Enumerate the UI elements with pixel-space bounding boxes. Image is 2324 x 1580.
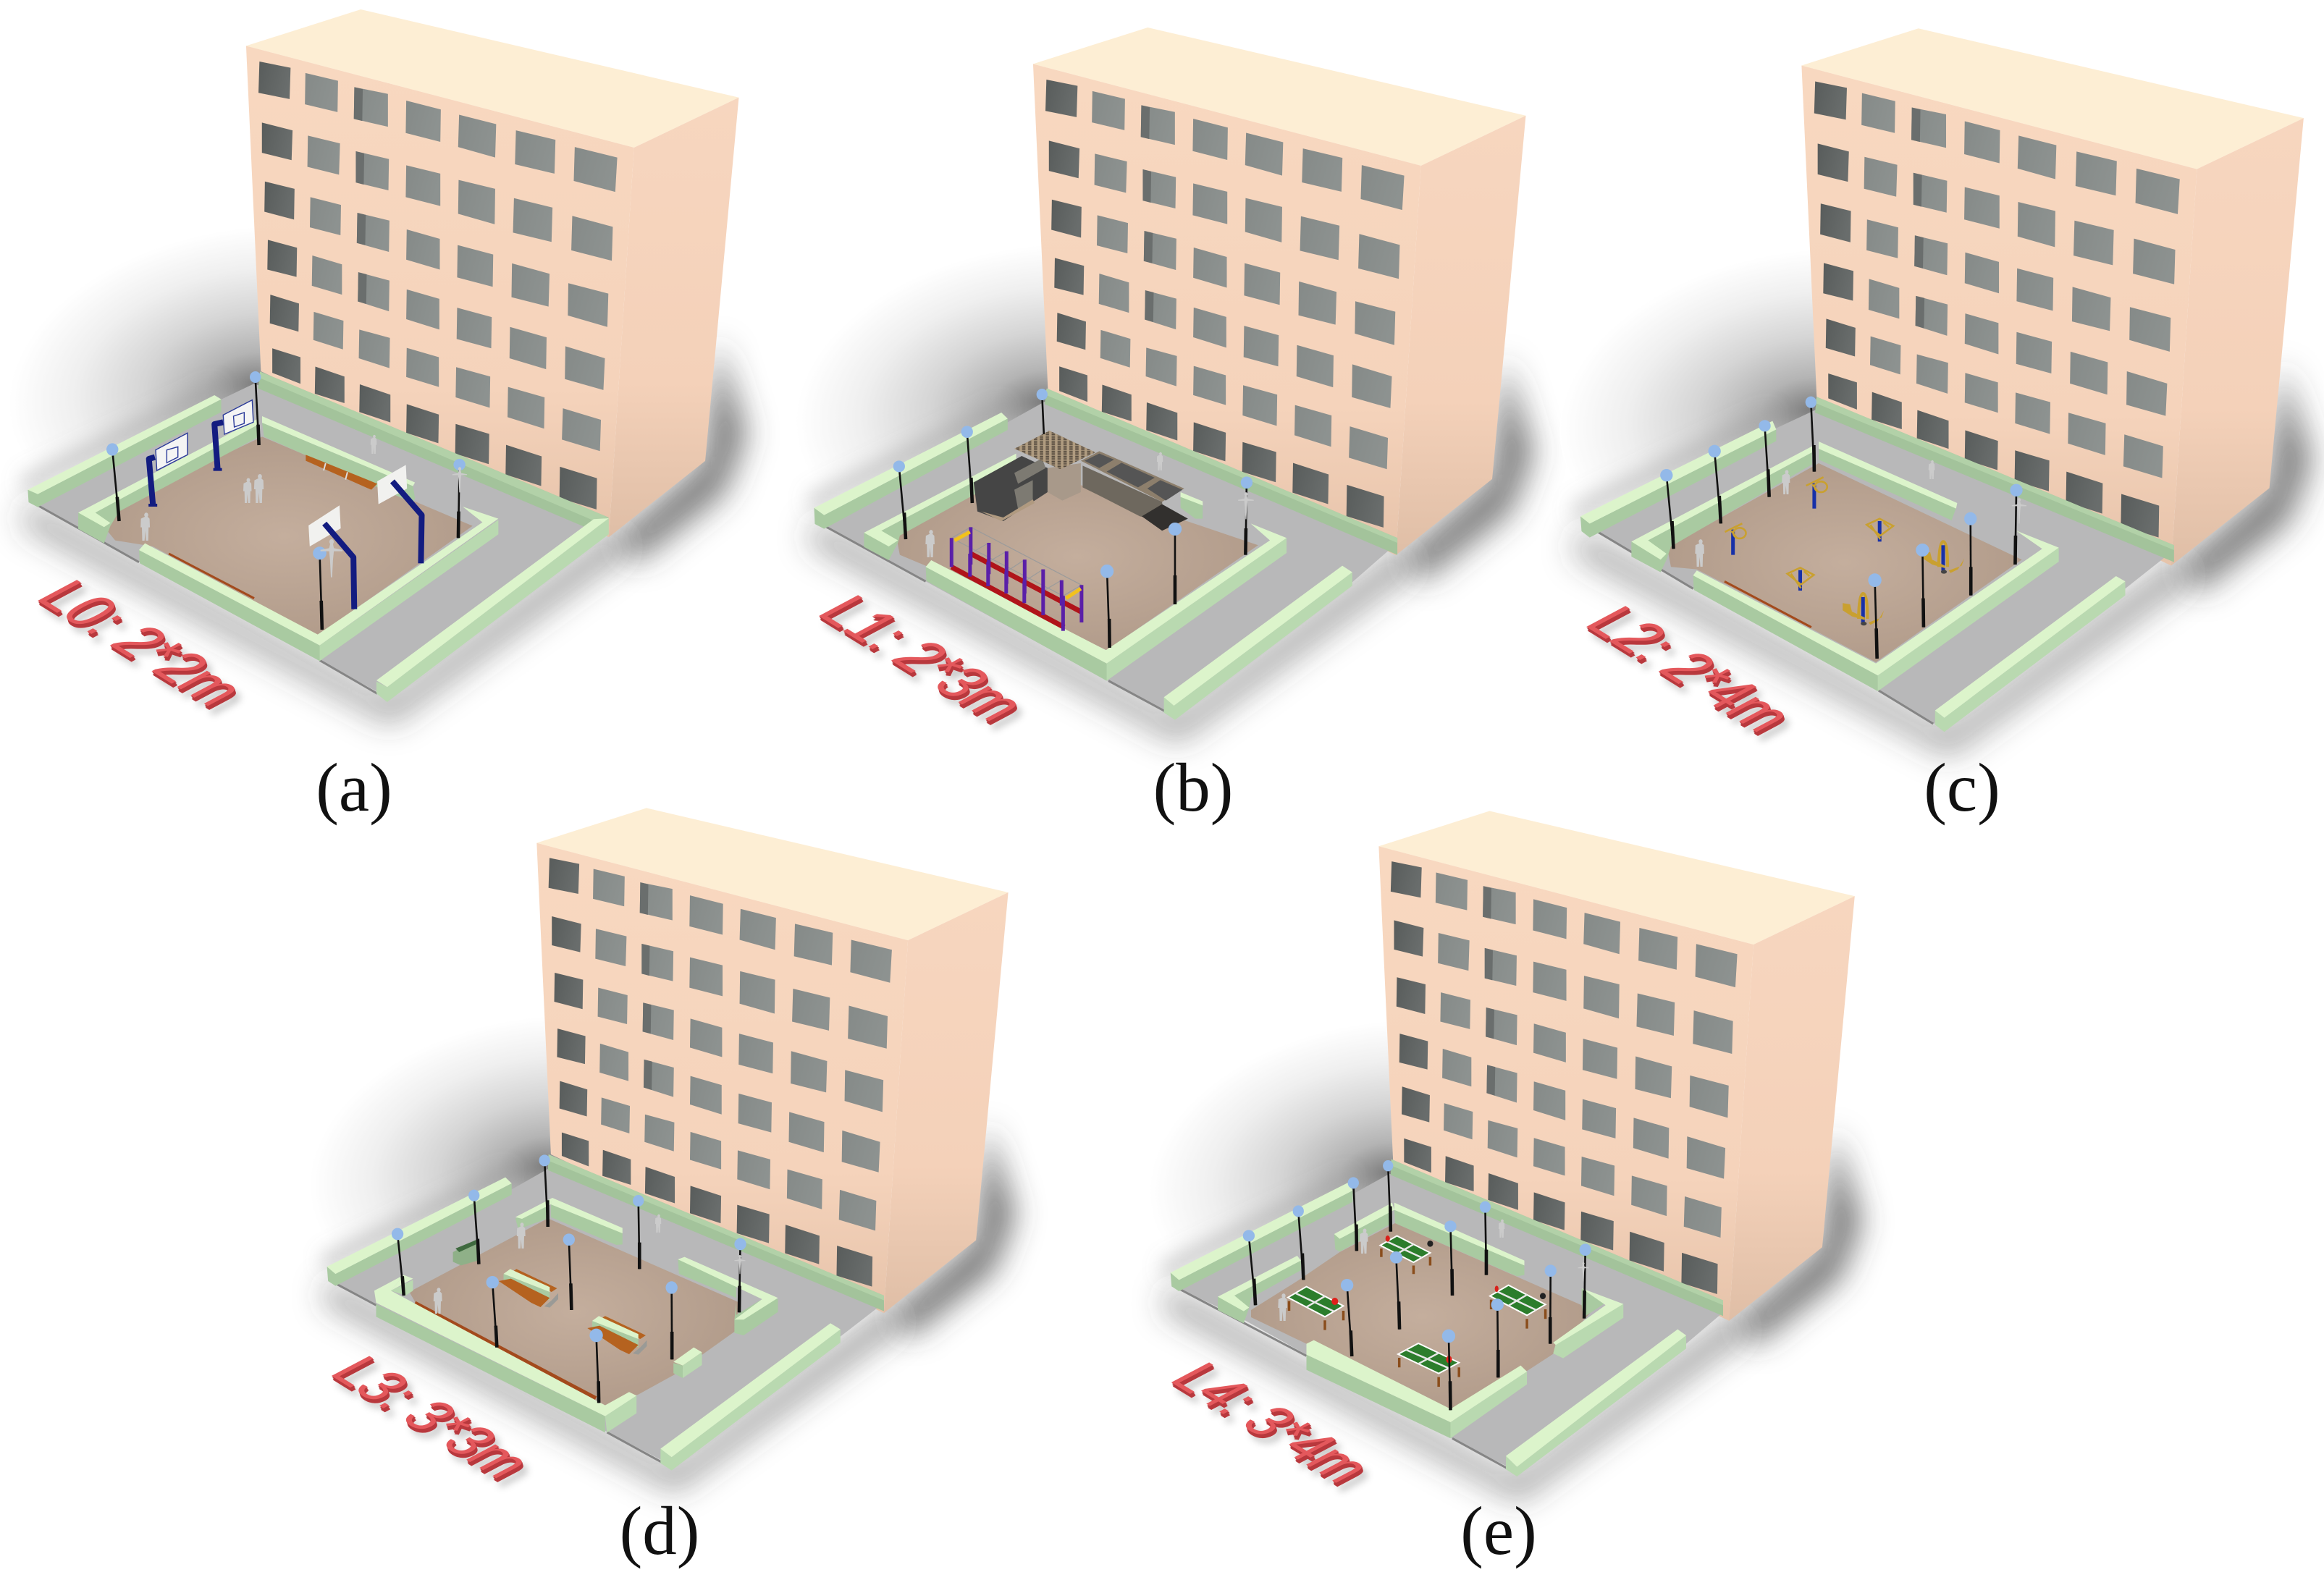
courtyard e [1171, 1159, 1723, 1477]
courtyard a [28, 371, 609, 702]
fitness equipment [1725, 477, 1964, 625]
lamps d [392, 1154, 746, 1403]
panel: (e) L4 table tennis [1129, 811, 1861, 1569]
lamps c [1660, 397, 2023, 659]
bench a [306, 455, 377, 490]
caption e: (e) [1460, 1492, 1537, 1569]
ping pong tables [1288, 1235, 1546, 1387]
caption c: (c) [1924, 749, 2000, 826]
lamps e [1243, 1160, 1591, 1410]
label b: L1: 2*3m [802, 587, 1043, 730]
caption b: (b) [1153, 749, 1233, 826]
building b [775, 28, 1533, 742]
building a [0, 9, 746, 724]
caption d: (d) [620, 1492, 699, 1569]
lamps b [893, 389, 1252, 648]
panel: (d) L3 benches [290, 808, 1015, 1569]
climbing rack [951, 527, 1082, 631]
people c [1695, 460, 2026, 567]
panel: (c) L2 fitness [1538, 28, 2311, 826]
people e [1278, 1220, 1589, 1321]
courtyard b [814, 389, 1397, 720]
label c: L2: 2*4m [1570, 598, 1810, 740]
people a [140, 435, 467, 578]
benches d [499, 1269, 647, 1355]
people d [434, 1214, 746, 1314]
caption a: (a) [316, 749, 392, 826]
label a: L0: 2*2m [21, 572, 261, 714]
panel: (b) L1 pergola and rack [775, 28, 1533, 826]
building d [290, 808, 1015, 1492]
label d: L3: 3*3m [316, 1348, 549, 1487]
courtyard d [327, 1154, 884, 1471]
panel: (a) L0 basketball [0, 9, 746, 826]
courtyard c [1580, 397, 2174, 732]
building c [1538, 28, 2311, 756]
people b [925, 452, 1254, 557]
building e [1129, 811, 1861, 1501]
pergola [974, 431, 1188, 531]
lamps a [106, 371, 466, 630]
label e: L4: 3*4m [1155, 1354, 1389, 1491]
hoops a [149, 400, 422, 609]
